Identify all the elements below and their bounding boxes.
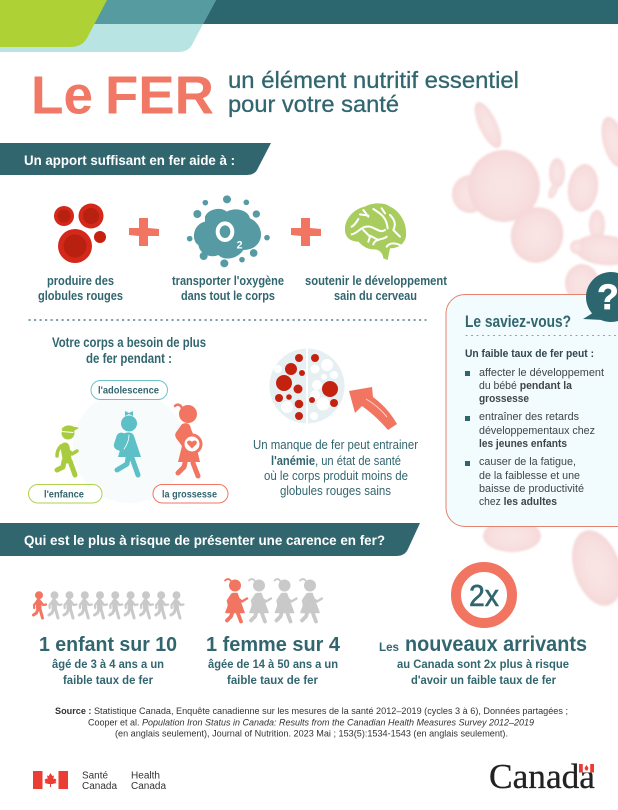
list: effets: les jeunes enfants (479, 438, 567, 450)
stat: 1 enfant sur 10 (34, 591, 184, 687)
stat: 1 femme sur 4: 1 femme sur 4 (206, 633, 341, 656)
benefit: globules rouges (38, 204, 123, 303)
icon: Canadian flag (33, 771, 68, 789)
list: effets: du bébé pendant la (479, 380, 573, 392)
label: la grossesse: la grossesse (162, 488, 217, 500)
title (31, 66, 519, 126)
source text: Cooper et al. Population Iron Status in Canada: Results from the Canadian Health Measures Survey 2012–2019 (88, 718, 534, 728)
stat: 1 femme sur 4: faible taux de fer (227, 673, 318, 687)
benefit: oxygène: transporter l'oxygène (172, 274, 284, 288)
text: anémie: globules rouges sains (280, 484, 391, 498)
stat: nouveaux arrivants (379, 567, 587, 687)
list: effets: de la faiblesse et une (479, 470, 580, 482)
icon: question bubble (583, 272, 618, 322)
source text: Source : Statistique Canada, Enquête canadienne sur les mesures de la santé 2012–2019 (cycles 3 à 6), Données partagées ; (55, 706, 568, 716)
text: anémie: Un manque de fer peut entrainer (253, 438, 418, 452)
logo: Canada wordmark: Canada (489, 757, 595, 796)
source text (55, 706, 568, 738)
arrow: pointing to anemia sample (349, 387, 397, 430)
panel: le saviez-vous (446, 272, 618, 526)
list: effets: chez les adultes (479, 496, 557, 508)
logo: Santé Canada: Canada (82, 781, 117, 792)
stat: 1 femme sur 4 (206, 579, 341, 687)
stat: nouveaux arrivants: au Canada sont 2x plus à risque (397, 657, 569, 671)
title: Le (31, 66, 93, 126)
panel: le saviez-vous: Un faible taux de fer peut : (465, 348, 594, 360)
list: effets: grossesse (479, 393, 529, 405)
benefit: oxygène (172, 195, 284, 303)
benefit: globules rouges: globules rouges (38, 289, 123, 303)
list: effets: développementaux chez (479, 425, 595, 437)
list: effets: affecter le développement (479, 367, 604, 379)
pictogram: ten children (34, 591, 184, 618)
title: FER (105, 66, 214, 126)
benefit: cerveau: soutenir le développement (305, 274, 448, 288)
heading banner: apport suffisant (0, 143, 271, 175)
source text: (en anglais seulement), Journal of Nutrition. 2023 Mai ; 153(5):1534-1543 (en anglais seulement). (115, 728, 508, 738)
benefit: globules rouges: produire des (47, 274, 114, 288)
title: un élément nutritif essentiel (228, 67, 519, 93)
top header band (0, 0, 618, 52)
icon: 2x ring (456, 567, 512, 623)
heading: besoin de plus de fer: de fer pendant : (86, 351, 172, 366)
figure: adolescente (113, 411, 141, 475)
logo: Santé Canada: Canada (131, 781, 166, 792)
stat: 1 femme sur 4: âgée de 14 à 50 ans a un (208, 657, 338, 671)
pictogram: four women (225, 579, 322, 622)
section: besoin de fer (28, 335, 228, 503)
list: effets (465, 367, 604, 508)
heading banner: à risque (0, 523, 420, 556)
list: effets: baisse de productivité (479, 483, 584, 495)
heading banner: apport suffisant: Un apport suffisant en fer aide à : (24, 152, 235, 168)
label: l'adolescence: l'adolescence (98, 384, 159, 396)
title: pour votre santé (228, 91, 399, 117)
icon: anemia blood sample (270, 348, 344, 424)
stat: nouveaux arrivants: nouveaux arrivants (405, 633, 587, 656)
figure: enfant (57, 426, 78, 475)
icon: oxygen cloud: 2 (237, 239, 243, 251)
icon: red blood cells (54, 204, 106, 263)
figure: femme enceinte (175, 405, 202, 476)
text: anémie: l'anémie, un état de santé (271, 454, 401, 468)
icon: plus (291, 218, 321, 246)
label: l'enfance (28, 484, 102, 503)
label: l'adolescence (91, 380, 168, 400)
label: l'enfance: l'enfance (44, 488, 84, 500)
stat: 1 enfant sur 10: faible taux de fer (63, 673, 153, 687)
heading: besoin de plus de fer: Votre corps a besoin de plus (52, 335, 206, 350)
benefit: oxygène: dans tout le corps (181, 289, 275, 303)
list: effets: entraîner des retards (479, 411, 579, 423)
icon: 2x ring: 2x (469, 578, 499, 613)
heading: besoin de plus de fer (52, 335, 206, 366)
logo: Santé Canada: Health (131, 770, 160, 782)
list: effets: causer de la fatigue, (479, 456, 576, 468)
stat: 1 enfant sur 10: âgé de 3 à 4 ans a un (52, 657, 164, 671)
background: blood cells (452, 99, 618, 612)
text: anémie (253, 438, 418, 498)
text: anémie: où le corps produit moins de (264, 469, 408, 483)
logo: Santé Canada: Santé (82, 770, 108, 782)
benefit: cerveau (305, 203, 448, 303)
benefit: cerveau: sain du cerveau (334, 289, 417, 303)
stat: nouveaux arrivants: Les (379, 640, 399, 654)
logo: Santé Canada (33, 770, 166, 792)
icon: plus (129, 218, 159, 246)
heading banner: à risque: Qui est le plus à risque de présenter une carence en fer? (24, 532, 385, 548)
stat: 1 enfant sur 10: 1 enfant sur 10 (39, 633, 177, 656)
stat: nouveaux arrivants: d'avoir un faible taux de fer (411, 673, 556, 687)
icon: brain (345, 203, 406, 260)
label: la grossesse (153, 484, 228, 503)
panel: le saviez-vous: Le saviez-vous? (465, 313, 571, 331)
